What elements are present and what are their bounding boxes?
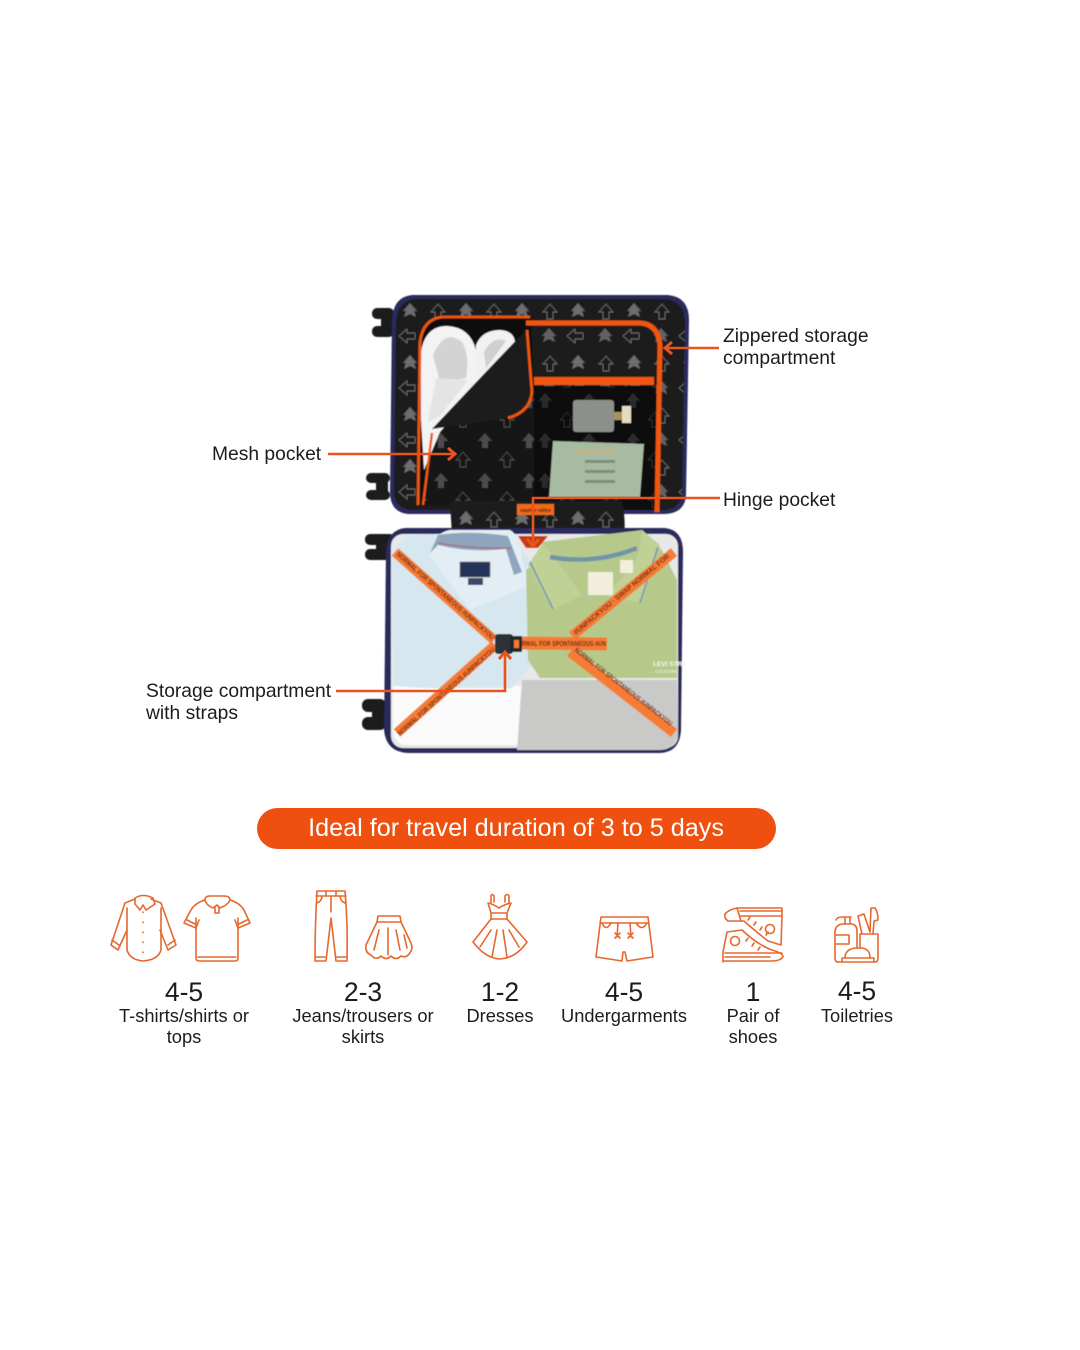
panel: upper lid patterned lining (394, 299, 685, 510)
stat: jeans/trousers or skirts: Jeans/trousers or (292, 1005, 434, 1026)
icon: green pouch (549, 441, 644, 497)
icon: perfume bottle (573, 400, 631, 432)
label: mesh pocket: Mesh pocket (212, 444, 322, 465)
icon: dress (473, 894, 527, 959)
panel: lower mesh area (424, 398, 534, 506)
orange straps with text: RMAL FOR SPONTANEOUS #UN (522, 641, 606, 648)
panel: lower case interior (391, 534, 678, 748)
stat: toiletries: Toiletries (821, 1005, 893, 1026)
icon: toiletries (835, 908, 878, 962)
stat: pair of shoes: Pair of (727, 1005, 780, 1026)
stat: jeans/trousers or skirts: 2-3 (344, 977, 382, 1007)
stat: dresses (466, 977, 534, 1026)
orange straps with text: NORMAL FOR SPONTANEOUS #UNPACKYOU (395, 551, 495, 641)
stat: toiletries (821, 976, 893, 1026)
arrow: hinge pocket (527, 498, 720, 546)
shirt: light blue (392, 530, 540, 688)
label: hinge pocket: Hinge pocket (723, 490, 836, 511)
panel: upper lid shell (390, 295, 689, 514)
panel: orange zip piping (418, 317, 660, 512)
stat: T-shirts/shirts or tops: 4-5 (165, 977, 203, 1007)
label: storage compartment with straps: Storage compartment (146, 681, 332, 702)
icon: shirt and polo (111, 896, 250, 961)
shirt: green polo (526, 530, 687, 678)
icon: trousers and skirt (315, 891, 412, 961)
panel: lower case shell (384, 528, 683, 753)
label: storage compartment with straps (145, 681, 332, 724)
stat: dresses: Dresses (466, 1005, 534, 1026)
stat: pair of shoes (727, 977, 780, 1047)
icon: strap buckle (495, 634, 522, 654)
orange straps with text (395, 551, 674, 737)
stat: T-shirts/shirts or tops (119, 977, 249, 1047)
stat: undergarments: Undergarments (561, 1005, 687, 1026)
orange straps with text: #UNPACKYOU · SWAP NORMAL FOR (573, 553, 671, 637)
label tag on hinge pocket (517, 504, 554, 515)
panel: hinge pocket (450, 501, 625, 536)
icon: sneakers (723, 908, 783, 962)
wheels (362, 308, 395, 730)
stat: jeans/trousers or skirts (292, 977, 434, 1047)
stat: toiletries: 4-5 (838, 976, 876, 1006)
white towel (393, 686, 522, 745)
stat: T-shirts/shirts or tops: tops (167, 1026, 201, 1047)
panel: black pocket flap (432, 331, 533, 429)
stat: undergarments: 4-5 (605, 977, 643, 1007)
banner: ideal travel duration: Ideal for travel duration of 3 to 5 days (308, 814, 724, 842)
banner: ideal travel duration (257, 808, 776, 849)
shirt: green polo: LEVI STRA (653, 661, 687, 668)
arrow: mesh pocket (328, 448, 455, 460)
stat: pair of shoes: 1 (746, 977, 760, 1007)
stat: pair of shoes: shoes (729, 1026, 777, 1047)
orange straps with text: NORMAL FOR SPONTANEOUS #UNPACKYOU (397, 647, 496, 737)
shirt: green polo: CALIFORN (655, 669, 678, 674)
stat: dresses: 1-2 (481, 977, 519, 1007)
hinge strip pocket in lower case (518, 536, 548, 548)
label: zippered storage compartment (723, 326, 869, 369)
icon: white shoes (421, 326, 515, 470)
label: zippered storage compartment: Zippered storage (723, 326, 869, 347)
orange straps with text: NORMAL FOR SPONTANEOUS #UNPACKYOU (573, 647, 673, 728)
label tag on hinge pocket: nasher miles (520, 508, 551, 514)
panel: right mesh pocket (534, 386, 656, 510)
arrow: zippered storage compartment (665, 342, 719, 354)
label: storage compartment with straps: with straps (145, 703, 238, 724)
stat: undergarments (561, 977, 687, 1026)
stat: T-shirts/shirts or tops: T-shirts/shirts or (119, 1005, 249, 1026)
label: zippered storage compartment: compartment (723, 348, 836, 369)
panel: left mesh pocket (420, 318, 534, 506)
stat: jeans/trousers or skirts: skirts (342, 1026, 384, 1047)
icon group: suitcase open interior photo (362, 295, 689, 753)
grey towel (517, 680, 678, 750)
icon: undergarment shorts (596, 917, 653, 961)
arrow: storage compartment with straps (336, 652, 511, 691)
